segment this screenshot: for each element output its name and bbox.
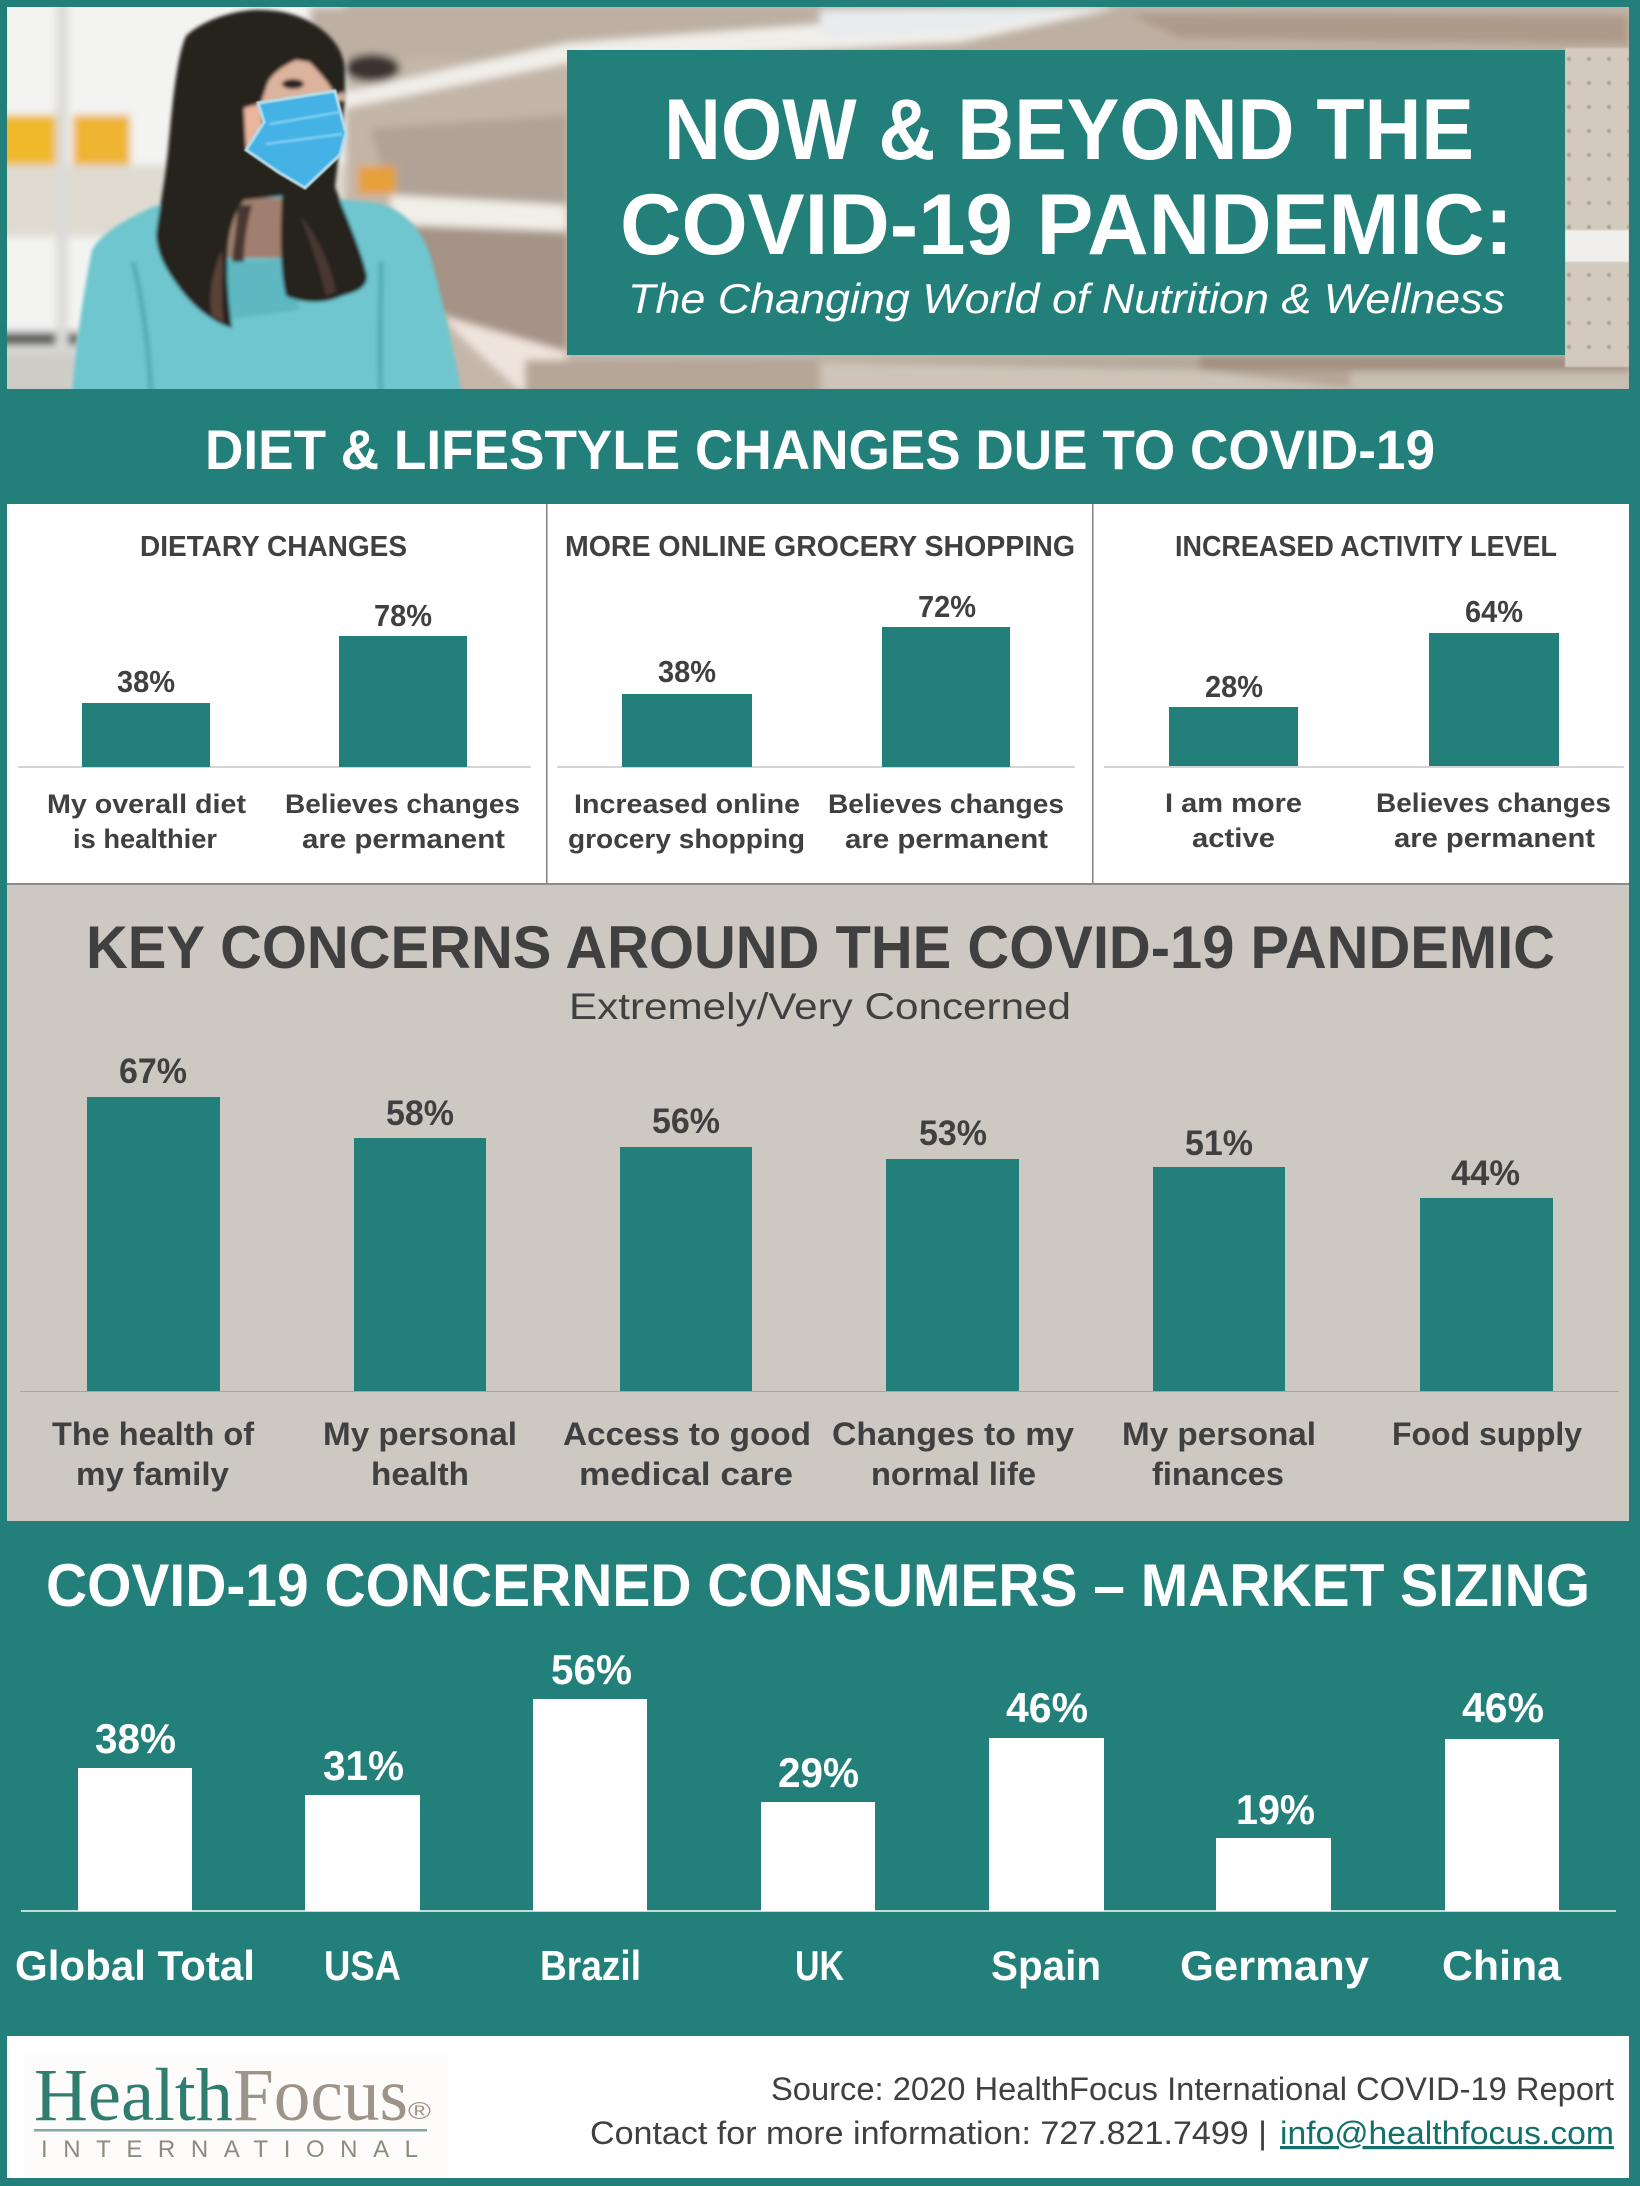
bar: my personal finances: finances [1152,1456,1284,1492]
bar: i am more active: 28% [1205,669,1263,704]
bar: believes changes are permanent [285,598,520,854]
bar: my personal health: health [371,1456,469,1492]
bar: believes changes are permanent: are permanent [1394,823,1595,853]
bar: my personal health [323,1094,517,1492]
bar: the health of my family: 67% [119,1052,187,1091]
bar: food supply: 44% [1451,1154,1520,1193]
bar: brazil: Brazil [540,1942,641,1989]
footer [7,2036,1629,2178]
bar: access to good medical care: medical care [579,1456,793,1492]
section heading: diet and lifestyle changes: DIET & LIFESTYLE CHANGES DUE TO COVID-19 [205,418,1435,481]
bar: the health of my family: my family [76,1456,229,1492]
bar: my personal finances: My personal [1122,1416,1316,1452]
bar: uk [761,1749,875,1989]
bar: my personal finances [1122,1124,1316,1492]
bar: increased online grocery shopping: 38% [658,654,716,689]
woman [72,195,462,395]
bar: access to good medical care [563,1102,811,1492]
bar: i am more active: I am more [1165,788,1302,818]
heading: market sizing: COVID-19 CONCERNED CONSUMERS – MARKET SIZING [46,1552,1590,1619]
bar: uk: UK [795,1942,844,1989]
panel: increased activity level [1104,531,1624,853]
logo: healthfocus international: Health [34,2054,233,2137]
bar: believes changes are permanent: are permanent [845,824,1048,854]
bar: i am more active [1165,669,1302,853]
bar: my personal finances: 51% [1185,1124,1253,1163]
bar: believes changes are permanent: 64% [1465,594,1523,629]
bar: spain: 46% [1006,1684,1088,1731]
contact line: Contact for more information: 727.821.7499 | [590,2115,1267,2151]
bar: brazil [533,1646,647,1989]
bar: global total: 38% [95,1715,176,1762]
subheading: Extremely/Very Concerned [569,986,1071,1027]
face mask [246,91,346,188]
panel heading: INCREASED ACTIVITY LEVEL [1175,531,1557,563]
bar: china: China [1442,1942,1562,1989]
bar: my overall diet is healthier: My overall diet [47,789,246,819]
bar: access to good medical care: 56% [652,1102,720,1141]
bar: changes to my normal life [832,1114,1074,1492]
panel: market sizing [15,1552,1616,1989]
panel: more online grocery shopping [557,531,1075,854]
bar: my overall diet is healthier: 38% [117,664,175,699]
bar: increased online grocery shopping: Increased online [574,789,800,819]
bar: spain: Spain [991,1942,1101,1989]
logo: healthfocus international: INTERNATIONAL [41,2136,418,2163]
bar: germany: 19% [1236,1786,1315,1833]
bar: my overall diet is healthier: is healthier [73,824,217,854]
bar: spain [989,1684,1104,1989]
bar: usa: USA [324,1942,401,1989]
bar: global total: Global Total [15,1942,255,1989]
bar: believes changes are permanent [1376,594,1611,853]
bar: believes changes are permanent: Believes changes [1376,788,1611,818]
contact email: info@healthfocus.com [1280,2115,1614,2151]
title line 1: NOW & BEYOND THE [664,82,1474,178]
bar: changes to my normal life: Changes to my [832,1416,1074,1452]
heading: key concerns: KEY CONCERNS AROUND THE COVID-19 PANDEMIC [86,914,1555,981]
subtitle: The Changing World of Nutrition & Wellness [628,275,1505,322]
bar: food supply: Food supply [1392,1416,1582,1452]
header photo: woman in mask by empty shelves [0,0,1640,395]
bar: the health of my family [52,1052,254,1492]
bar: believes changes are permanent: 78% [374,598,432,633]
bar: i am more active: active [1192,823,1275,853]
bar: uk: 29% [778,1749,859,1796]
panel: dietary changes [18,531,531,854]
bar: global total [15,1715,255,1989]
bar: believes changes are permanent: Believes changes [828,789,1064,819]
title line 2: COVID-19 PANDEMIC: [620,177,1513,273]
bar: increased online grocery shopping [568,654,805,854]
bar: usa [305,1742,420,1989]
bar: brazil: 56% [551,1646,632,1693]
bar: believes changes are permanent: 72% [918,589,976,624]
panel heading: DIETARY CHANGES [140,531,407,563]
bar: increased online grocery shopping: grocery shopping [568,824,805,854]
bar: believes changes are permanent: Believes changes [285,789,520,819]
bar: china [1442,1684,1562,1989]
bar: changes to my normal life: 53% [919,1114,987,1153]
logo: healthfocus international: ® [408,2098,431,2125]
bar: germany: Germany [1180,1942,1370,1989]
panel heading: MORE ONLINE GROCERY SHOPPING [565,531,1075,563]
bar: my overall diet is healthier [47,664,246,854]
title box [567,50,1565,355]
bar: the health of my family: The health of [52,1416,254,1452]
panel: key concerns [7,885,1629,1521]
bar: believes changes are permanent [828,589,1064,854]
bar: access to good medical care: Access to good [563,1416,811,1452]
bar: food supply [1392,1154,1582,1452]
logo: healthfocus international: Focus [233,2054,408,2137]
bar: my personal health: My personal [323,1416,517,1452]
bar: china: 46% [1462,1684,1544,1731]
bar: my personal health: 58% [386,1094,454,1133]
bar: changes to my normal life: normal life [871,1456,1036,1492]
bar: germany [1180,1786,1370,1989]
logo: healthfocus international [24,2054,448,2177]
bar: believes changes are permanent: are permanent [302,824,505,854]
white panel group: diet and lifestyle [7,504,1629,885]
source line: Source: 2020 HealthFocus International COVID-19 Report [771,2071,1614,2107]
bar: usa: 31% [323,1742,404,1789]
